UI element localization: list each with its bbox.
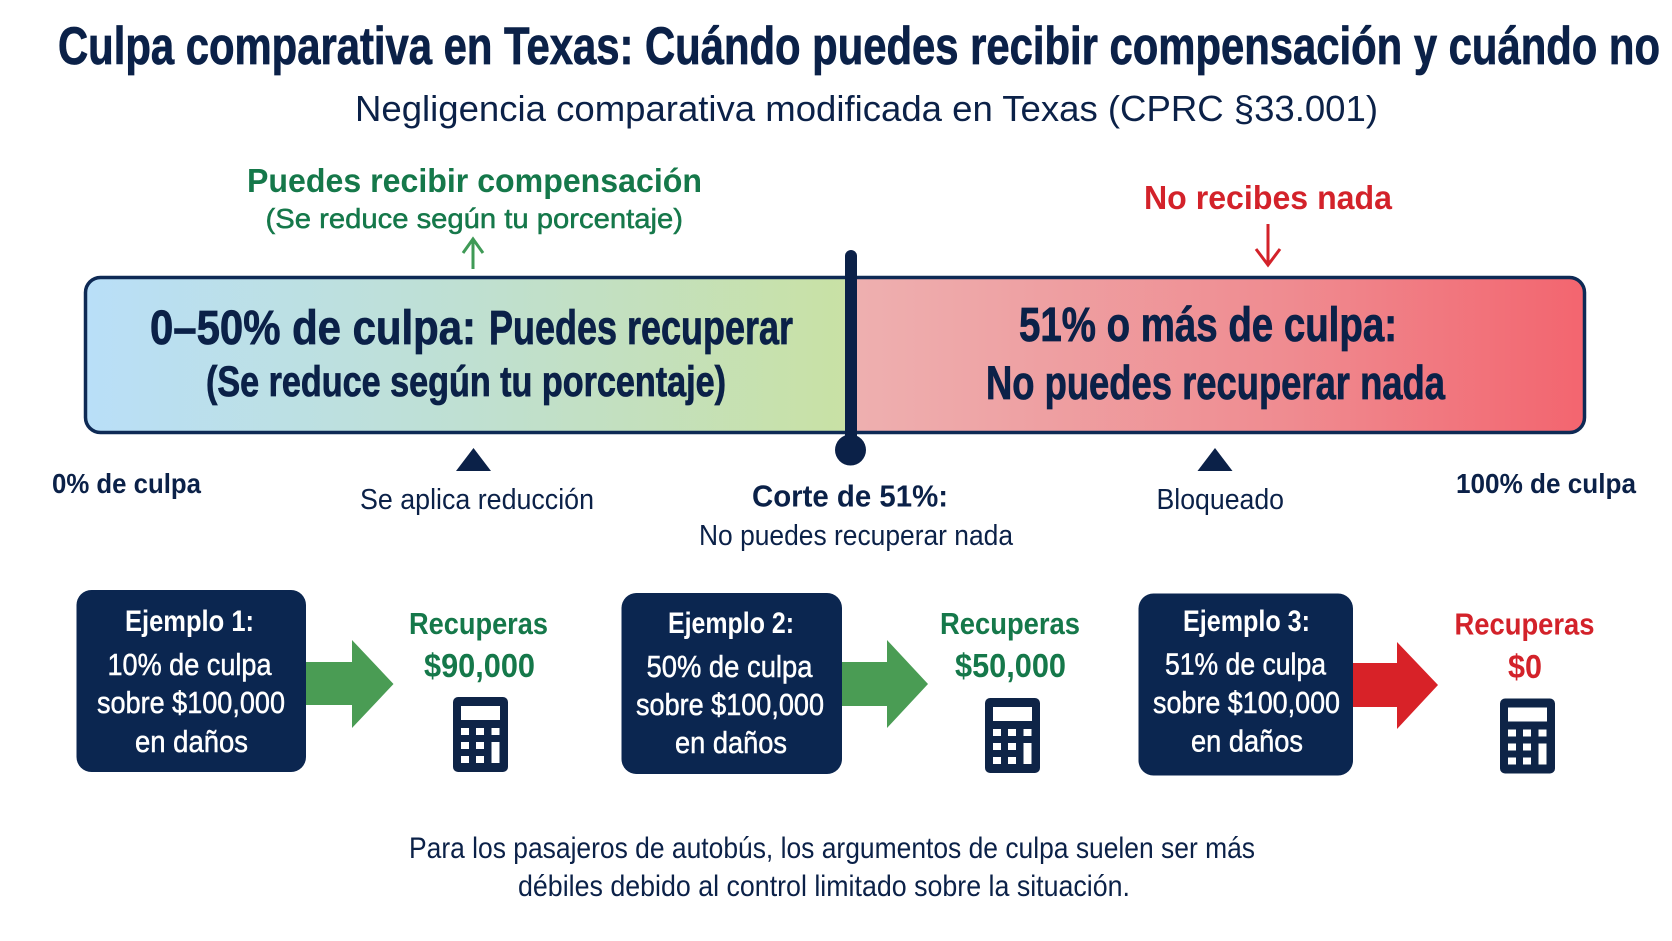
label: 100%: 100% de culpa — [1456, 468, 1636, 499]
label: 51% cutoff: Corte de 51%: — [752, 478, 948, 514]
callout: can receive compensation — [247, 162, 702, 234]
panel: example 2: 50% de culpa — [646, 649, 813, 684]
arrow: example 2 — [842, 640, 928, 728]
footer note — [409, 832, 1255, 903]
51% cutoff divider — [835, 250, 866, 466]
label: blocked: Bloqueado — [1156, 484, 1284, 516]
panel: example 3: sobre $100,000 — [1153, 685, 1340, 720]
panel: example 1: sobre $100,000 — [97, 685, 285, 720]
panel: example 1: Ejemplo 1: — [125, 605, 254, 638]
bar text: 0-50%: (Se reduce según tu porcentaje) — [206, 358, 726, 406]
label: 0%: 0% de culpa — [52, 468, 201, 499]
result: example 3 — [1454, 606, 1594, 685]
result: example 2 — [940, 606, 1080, 684]
icon: calculator 1 — [453, 697, 508, 772]
label: 51% cutoff: No puedes recuperar nada — [699, 520, 1014, 552]
bar text: 51% or more — [986, 299, 1446, 409]
footer note: débiles debido al control limitado sobre la situación. — [518, 870, 1130, 903]
panel: example 2: Ejemplo 2: — [668, 607, 794, 640]
callout: can receive compensation: (Se reduce según tu porcentaje) — [266, 203, 683, 234]
panel: example 2: en daños — [675, 725, 787, 760]
arrow: green up — [463, 239, 483, 269]
bar text: 51% or more: No puedes recuperar nada — [986, 356, 1446, 409]
label: reduction applies: Se aplica reducción — [360, 484, 594, 516]
panel: example 3: en daños — [1191, 724, 1303, 758]
result: example 2: $50,000 — [955, 647, 1066, 684]
bar text: 0-50%: Puedes recuperar — [489, 302, 793, 355]
fault spectrum bar — [85, 277, 1585, 433]
icon: calculator 2 — [985, 698, 1040, 773]
marker triangle right — [1198, 448, 1232, 471]
bar text: 51% or more: 51% o más de culpa: — [1019, 299, 1397, 352]
panel: example 3: 51% de culpa — [1165, 646, 1327, 682]
icon: calculator 3 — [1500, 698, 1555, 774]
panel: example 3: Ejemplo 3: — [1183, 605, 1310, 638]
panel: example 1: en daños — [135, 724, 248, 759]
panel: example 1: 10% de culpa — [108, 647, 272, 682]
result: example 1 — [409, 606, 548, 684]
subtitle: Negligencia comparativa modificada en Texas (CPRC §33.001) — [355, 88, 1378, 129]
bar text: 0-50%: 0–50% de culpa: — [150, 302, 476, 355]
marker triangle left — [456, 448, 491, 471]
result: example 3: Recuperas — [1454, 606, 1594, 642]
callout: can receive compensation: Puedes recibir compensación — [247, 162, 702, 199]
arrow: red down — [1256, 224, 1280, 265]
result: example 1: $90,000 — [424, 647, 535, 684]
panel: example 3 — [1138, 594, 1353, 776]
footer note: Para los pasajeros de autobús, los argumentos de culpa suelen ser más — [409, 832, 1255, 865]
bar text: 0-50% — [150, 302, 793, 406]
panel: example 2: sobre $100,000 — [636, 687, 824, 722]
arrow: example 3 — [1353, 642, 1438, 729]
panel: example 2 — [622, 593, 842, 774]
label: 51% cutoff — [699, 478, 1014, 552]
callout: receive nothing: No recibes nada — [1144, 179, 1393, 216]
panel: example 1 — [76, 590, 306, 772]
result: example 2: Recuperas — [940, 606, 1080, 641]
result: example 1: Recuperas — [409, 606, 548, 641]
arrow: example 1 — [306, 640, 394, 728]
result: example 3: $0 — [1508, 648, 1542, 685]
